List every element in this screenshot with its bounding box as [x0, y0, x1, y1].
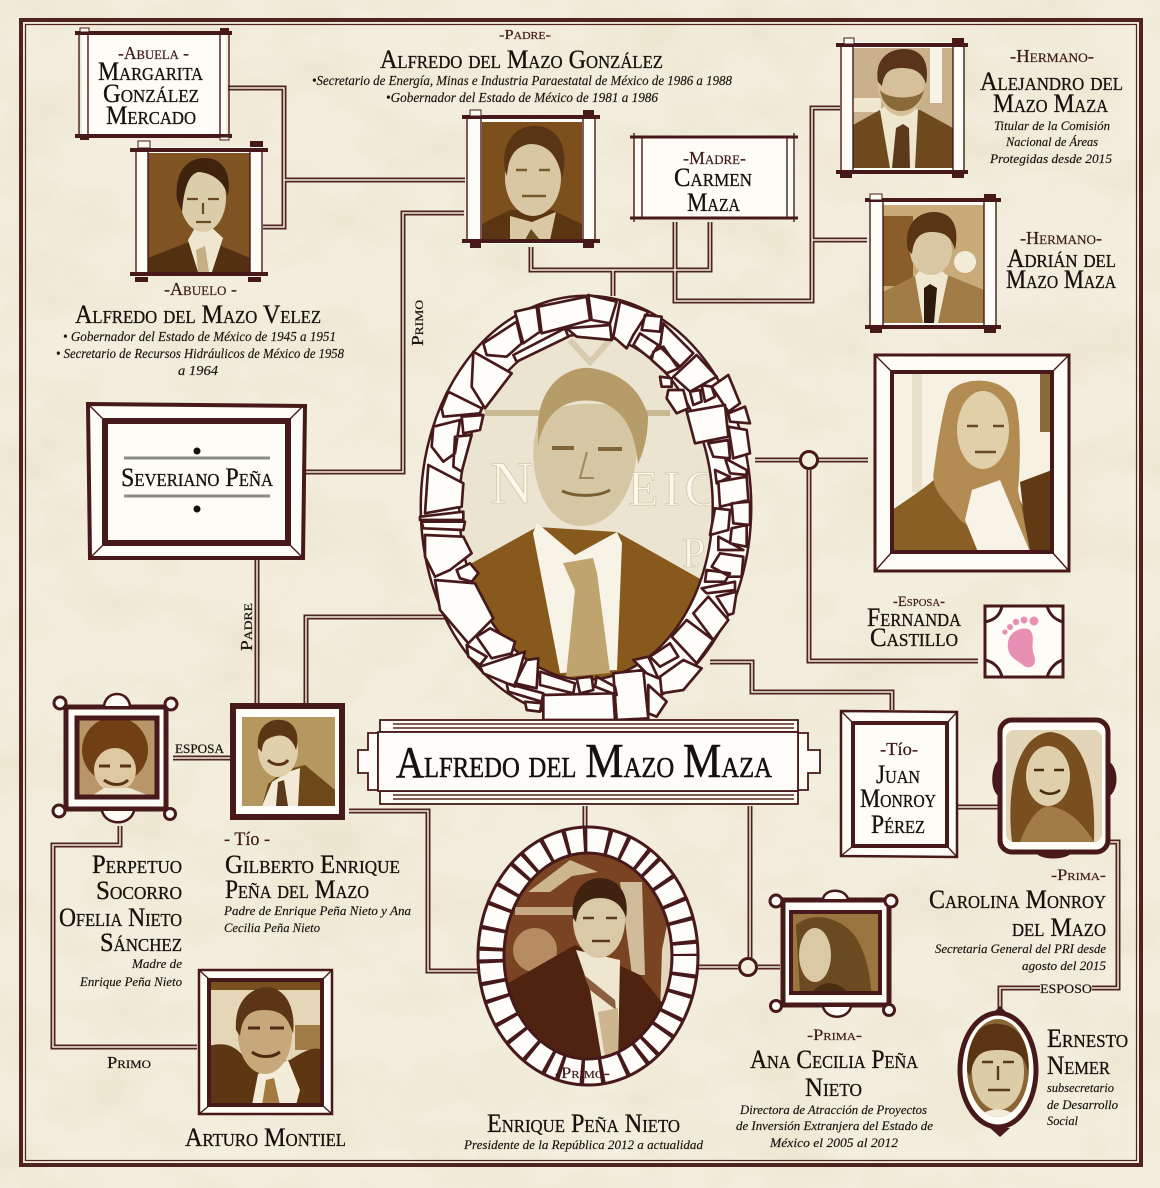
text: Prima Carolina: agosto del 2015 — [1022, 958, 1106, 973]
text: Hermano Adrián: Adrián del — [1007, 244, 1116, 273]
text: Prima Ana Cecilia: México el 2005 al 2012 — [769, 1135, 899, 1150]
text: Tío Gilberto: Peña del Mazo — [225, 875, 369, 904]
text: Primo Enrique Peña Nieto: Presidente de la República 2012 a actualidad — [463, 1137, 703, 1152]
text: Prima Ana Cecilia: Directora de Atracción de Proyectos — [739, 1102, 927, 1117]
text: Perpetuo Socorro: Perpetuo — [92, 850, 182, 879]
photo: EIC — [628, 460, 718, 516]
name: Severiano Peña — [121, 463, 273, 492]
portrait: Carolina Monroy del Mazo — [993, 720, 1116, 858]
text: Prima Ana Cecilia — [736, 1027, 933, 1150]
portrait: Alfredo del Mazo Maza with stone oval frame — [420, 295, 760, 720]
name — [98, 57, 203, 130]
text: Padre — [312, 28, 732, 106]
portrait: Perpetuo Socorro Ofelia Nieto Sánchez — [53, 694, 177, 822]
text: Perpetuo Socorro: Socorro — [96, 876, 182, 905]
portrait: Arturo Montiel — [199, 970, 332, 1114]
text: Hermano Adrián: Mazo Maza — [1006, 265, 1116, 294]
portrait: Enrique Peña Nieto with stone oval frame — [490, 840, 690, 1080]
text: Prima Carolina: Carolina Monroy — [929, 885, 1106, 914]
label: -Tío- — [880, 739, 918, 759]
junction ring: Ana Cecilia — [740, 958, 756, 976]
text: Ernesto Nemer: de Desarrollo — [1047, 1097, 1118, 1112]
text: Abuelo: • Secretario de Recursos Hidráulicos de México de 1958 — [56, 347, 344, 362]
text: Prima Ana Cecilia: Ana Cecilia Peña — [750, 1045, 918, 1074]
vertical label: Primo: Primo — [408, 300, 427, 346]
name: González — [103, 79, 199, 108]
photo: N — [490, 450, 533, 516]
text: Hermano Alejandro: -Hermano- — [1010, 46, 1094, 66]
portrait: Adrián del Mazo Maza — [865, 194, 1001, 333]
text: Tío Gilberto: Cecilia Peña Nieto — [224, 920, 320, 935]
text: Hermano Alejandro: Mazo Maza — [993, 89, 1108, 118]
text: Abuelo: Alfredo del Mazo Velez — [75, 300, 321, 329]
text: Ernesto Nemer — [1047, 1024, 1128, 1128]
text: Hermano Adrián — [1006, 228, 1116, 294]
text: Abuelo: • Gobernador del Estado de México de 1945 a 1951 — [63, 330, 336, 345]
text: Hermano Adrián: -Hermano- — [1020, 228, 1102, 248]
text: Perpetuo Socorro: Sánchez — [100, 928, 182, 957]
name: Mercado — [106, 101, 196, 130]
title text: Alfredo del Mazo Maza — [396, 733, 773, 788]
label: -Abuela - — [118, 43, 189, 63]
text: Perpetuo Socorro: Enrique Peña Nieto — [79, 974, 182, 989]
portrait: Alfredo del Mazo González — [462, 110, 600, 248]
text: Abuelo: -Abuelo - — [164, 279, 237, 299]
name: Juan — [876, 760, 920, 789]
text: Prima Ana Cecilia: -Prima- — [807, 1027, 862, 1044]
text: Arturo Montiel: Arturo Montiel — [185, 1123, 346, 1152]
photo — [506, 854, 670, 1058]
text: Primo Enrique Peña Nieto — [463, 1065, 703, 1152]
label: -Madre- — [683, 148, 746, 168]
card: Abuela Margarita — [75, 28, 232, 140]
text: Hermano Alejandro — [980, 46, 1123, 166]
text: Prima Carolina: del Mazo — [1012, 913, 1106, 942]
stone ring — [491, 840, 685, 1072]
label: Primo: Primo — [107, 1053, 151, 1072]
name: Carmen — [674, 163, 752, 192]
portrait: Ana Cecilia Peña Nieto — [770, 891, 897, 1017]
text: Abuelo — [56, 279, 344, 379]
text: Prima Carolina: -Prima- — [1051, 867, 1106, 884]
text: Esposa Fernanda — [867, 594, 961, 652]
text: Ernesto Nemer: Social — [1047, 1113, 1078, 1128]
connector lines — [53, 88, 1118, 1047]
portrait: Alejandro del Mazo Maza — [836, 38, 968, 178]
text: Ernesto Nemer: Ernesto — [1047, 1024, 1128, 1053]
text: Prima Carolina: Secretaria General del PRI desde — [935, 941, 1106, 956]
text: Ernesto Nemer: subsecretario — [1047, 1080, 1114, 1095]
name: Margarita — [98, 57, 203, 86]
icon: pink baby footprint — [985, 606, 1063, 677]
text: Tío Gilberto: - Tío - — [224, 829, 270, 850]
text: Perpetuo Socorro: Ofelia Nieto — [59, 903, 182, 932]
card: Severiano Peña — [88, 404, 305, 558]
text: Primo Enrique Peña Nieto: -Primo- — [555, 1065, 610, 1082]
vertical label: Padre: Padre — [237, 603, 256, 651]
text: Perpetuo Socorro — [59, 850, 182, 989]
text: Abuelo: a 1964 — [178, 364, 218, 379]
text: Perpetuo Socorro: Madre de — [131, 956, 182, 971]
text: Esposa Fernanda: Castillo — [870, 623, 958, 652]
label: Esposo: ESPOSO — [1040, 981, 1092, 996]
name — [860, 760, 936, 839]
junction ring: wife — [800, 452, 818, 468]
portrait: Ernesto Nemer — [960, 1006, 1040, 1137]
card: Madre Carmen Maza — [630, 133, 798, 222]
portrait: Fernanda Castillo — [875, 355, 1069, 571]
text: Hermano Alejandro: Titular de la Comisión — [994, 118, 1110, 133]
text: Tío Gilberto: Padre de Enrique Peña Nieto y Ana — [223, 903, 411, 918]
text: Tío Gilberto — [223, 829, 411, 935]
text: Padre: -Padre- — [499, 28, 551, 43]
text: Primo Enrique Peña Nieto: Enrique Peña Nieto — [487, 1109, 680, 1138]
photo — [462, 336, 712, 678]
photo: P — [682, 531, 705, 577]
stone ring — [420, 295, 750, 720]
text: Prima Ana Cecilia: de Inversión Extranjera del Estado de — [736, 1118, 933, 1133]
text: Ernesto Nemer: Nemer — [1047, 1051, 1110, 1080]
title banner — [358, 720, 820, 804]
text: Hermano Alejandro: Alejandro del — [980, 67, 1123, 96]
label: Esposa: ESPOSA — [175, 741, 225, 756]
text: Tío Gilberto: Gilberto Enrique — [225, 850, 400, 879]
name: Pérez — [871, 810, 925, 839]
text: Prima Carolina — [929, 867, 1106, 973]
name — [674, 163, 752, 217]
text: Hermano Alejandro: Protegidas desde 2015 — [989, 151, 1113, 166]
text: Prima Ana Cecilia: Nieto — [805, 1073, 862, 1102]
portrait: Alfredo del Mazo Velez — [130, 141, 268, 282]
card: Tío Juan Monroy Pérez — [841, 711, 957, 857]
text: Esposa Fernanda: -Esposa- — [893, 594, 945, 610]
portrait: Gilberto Enrique Peña del Mazo — [233, 706, 342, 817]
text: Hermano Alejandro: Nacional de Áreas — [1005, 134, 1098, 149]
name: Monroy — [860, 784, 936, 813]
text: Padre: •Gobernador del Estado de México de 1981 a 1986 — [386, 91, 658, 106]
text: Padre: •Secretario de Energía, Minas e Industria Paraestatal de México de 1986 a 1988 — [312, 74, 732, 89]
text: Esposa Fernanda: Fernanda — [867, 603, 961, 632]
name: Maza — [687, 188, 740, 217]
stone ring backing — [440, 315, 732, 699]
text: Padre: Alfredo del Mazo González — [380, 45, 663, 74]
